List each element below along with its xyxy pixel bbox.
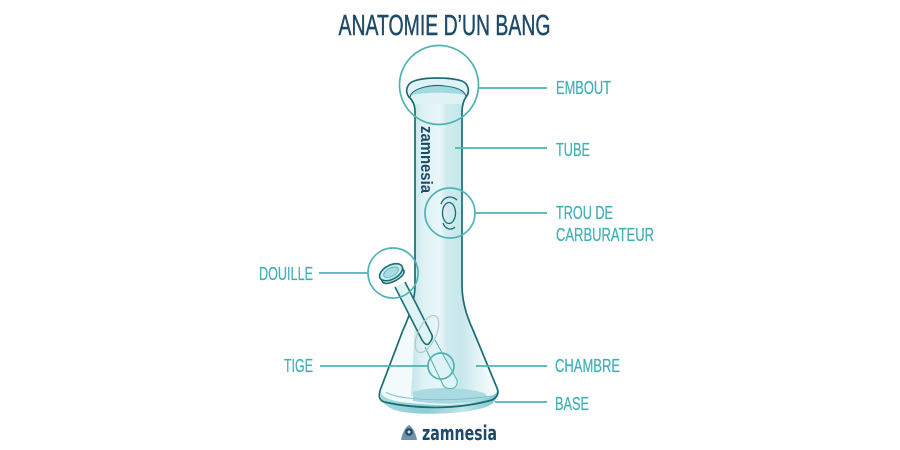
label: douille: DOUILLE <box>259 264 313 284</box>
mouthpiece glass <box>408 78 468 104</box>
label: base: BASE <box>555 394 589 414</box>
tube and central glass column <box>411 96 492 396</box>
mouthpiece inner rim <box>410 85 466 97</box>
label: trou de carburateur: TROU DE <box>556 203 613 223</box>
carburetor hole <box>441 197 457 229</box>
label: chambre: CHAMBRE <box>555 356 620 376</box>
title: ANATOMIE D’UN BANG <box>338 10 550 42</box>
logo on tube: zamnesia <box>417 126 436 193</box>
label: trou de carburateur: CARBURATEUR <box>556 225 654 245</box>
logo wordmark: zamnesia <box>422 421 497 445</box>
stem <box>395 282 458 389</box>
bowl socket <box>377 260 407 286</box>
bong outline <box>379 78 498 407</box>
logo icon <box>401 425 417 440</box>
label: trou de carburateur <box>556 203 654 245</box>
footer logo <box>401 421 497 445</box>
stem joint ring <box>410 312 444 356</box>
inner chamber line <box>386 392 493 400</box>
label: tige: TIGE <box>284 356 313 376</box>
bong illustration <box>377 78 498 414</box>
base glass <box>381 392 497 414</box>
water <box>413 388 488 404</box>
label: tube: TUBE <box>556 140 590 160</box>
label: embout: EMBOUT <box>556 78 611 98</box>
callout circles and leader lines <box>319 46 547 402</box>
chamber glass <box>379 285 498 407</box>
